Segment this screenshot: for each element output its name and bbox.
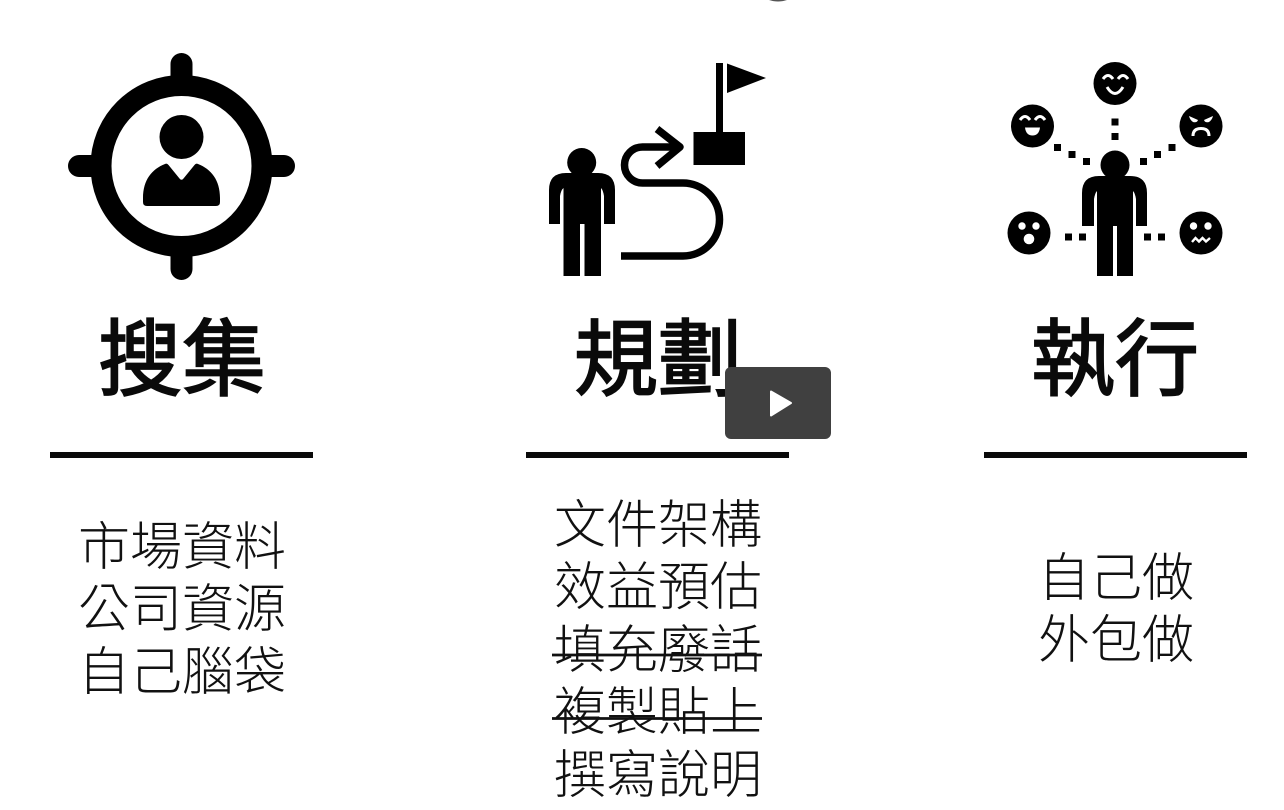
heading: 搜集: 搜集 <box>98 313 266 407</box>
heading: 執行: 執行 <box>1031 313 1199 407</box>
text block: 搜集 items <box>78 519 286 702</box>
text block: 規劃 items: 效益預估 <box>554 559 762 617</box>
icon: person, winding path and flag <box>549 63 766 276</box>
divider: 執行 <box>984 452 1247 458</box>
text block: 執行 items: 外包做 <box>1038 612 1194 670</box>
text block: 執行 items <box>1038 550 1194 670</box>
cropped mark at top edge <box>769 0 787 2</box>
text block: 搜集 items: 市場資料 <box>78 519 286 577</box>
icon: target with person <box>68 53 295 280</box>
text block: 規劃 items <box>554 497 762 805</box>
text block: 規劃 items: 填充廢話 <box>554 622 762 680</box>
heading: 規劃: 規劃 <box>574 313 742 407</box>
strikethrough lines <box>552 654 762 720</box>
play button <box>725 367 831 439</box>
divider: 規劃 <box>526 452 789 458</box>
text block: 執行 items: 自己做 <box>1038 550 1194 608</box>
icon: person surrounded by emotion faces <box>1008 62 1222 276</box>
text block: 搜集 items: 自己腦袋 <box>78 644 286 702</box>
divider: 搜集 <box>50 452 313 458</box>
text block: 規劃 items: 撰寫說明 <box>554 747 762 805</box>
text block: 規劃 items: 複製貼上 <box>554 684 762 742</box>
text block: 規劃 items: 文件架構 <box>554 497 762 555</box>
text block: 搜集 items: 公司資源 <box>78 581 286 639</box>
